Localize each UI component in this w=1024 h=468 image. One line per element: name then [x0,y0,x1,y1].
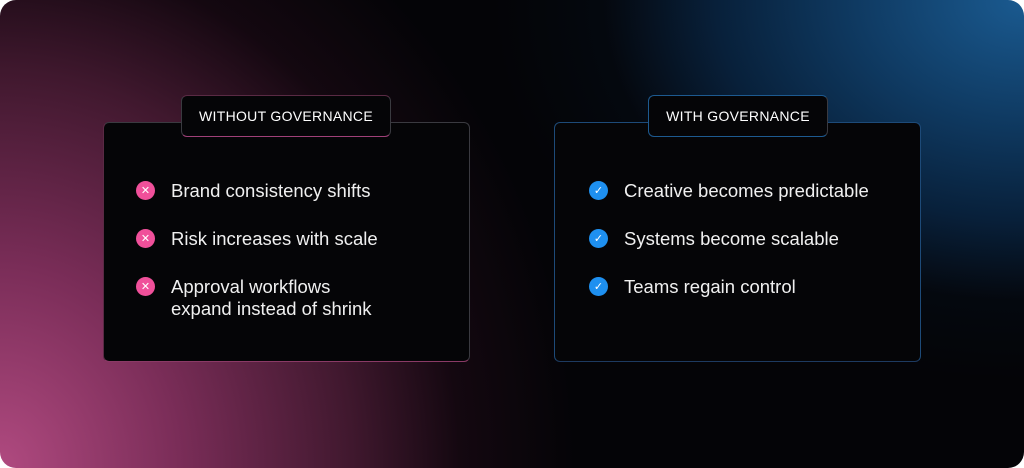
panel: without governance [103,122,470,362]
item: risk: Risk increases with scale [171,228,378,249]
panel: with governance [554,122,921,362]
tab: without governance: WITHOUT GOVERNANCE [199,108,373,124]
tab: with governance [648,95,828,137]
item: teams control: ✓ [594,280,603,292]
item: systems scalable: ✓ [594,232,603,244]
item: creative predictable: Creative becomes predictable [624,180,869,201]
tab: without governance [181,95,391,137]
tab: with governance: WITH GOVERNANCE [666,108,810,124]
item: approval workflows: expand instead of shrink [171,298,372,319]
item: risk: ✕ [141,232,150,244]
item: approval workflows [136,276,372,319]
item: brand consistency: ✕ [141,184,150,196]
item: approval workflows: ✕ [141,280,150,292]
item: approval workflows: Approval workflows [171,276,330,297]
item: systems scalable: Systems become scalable [624,228,839,249]
item: brand consistency: Brand consistency shifts [171,180,370,201]
item: creative predictable: ✓ [594,184,603,196]
item: teams control: Teams regain control [624,276,796,297]
